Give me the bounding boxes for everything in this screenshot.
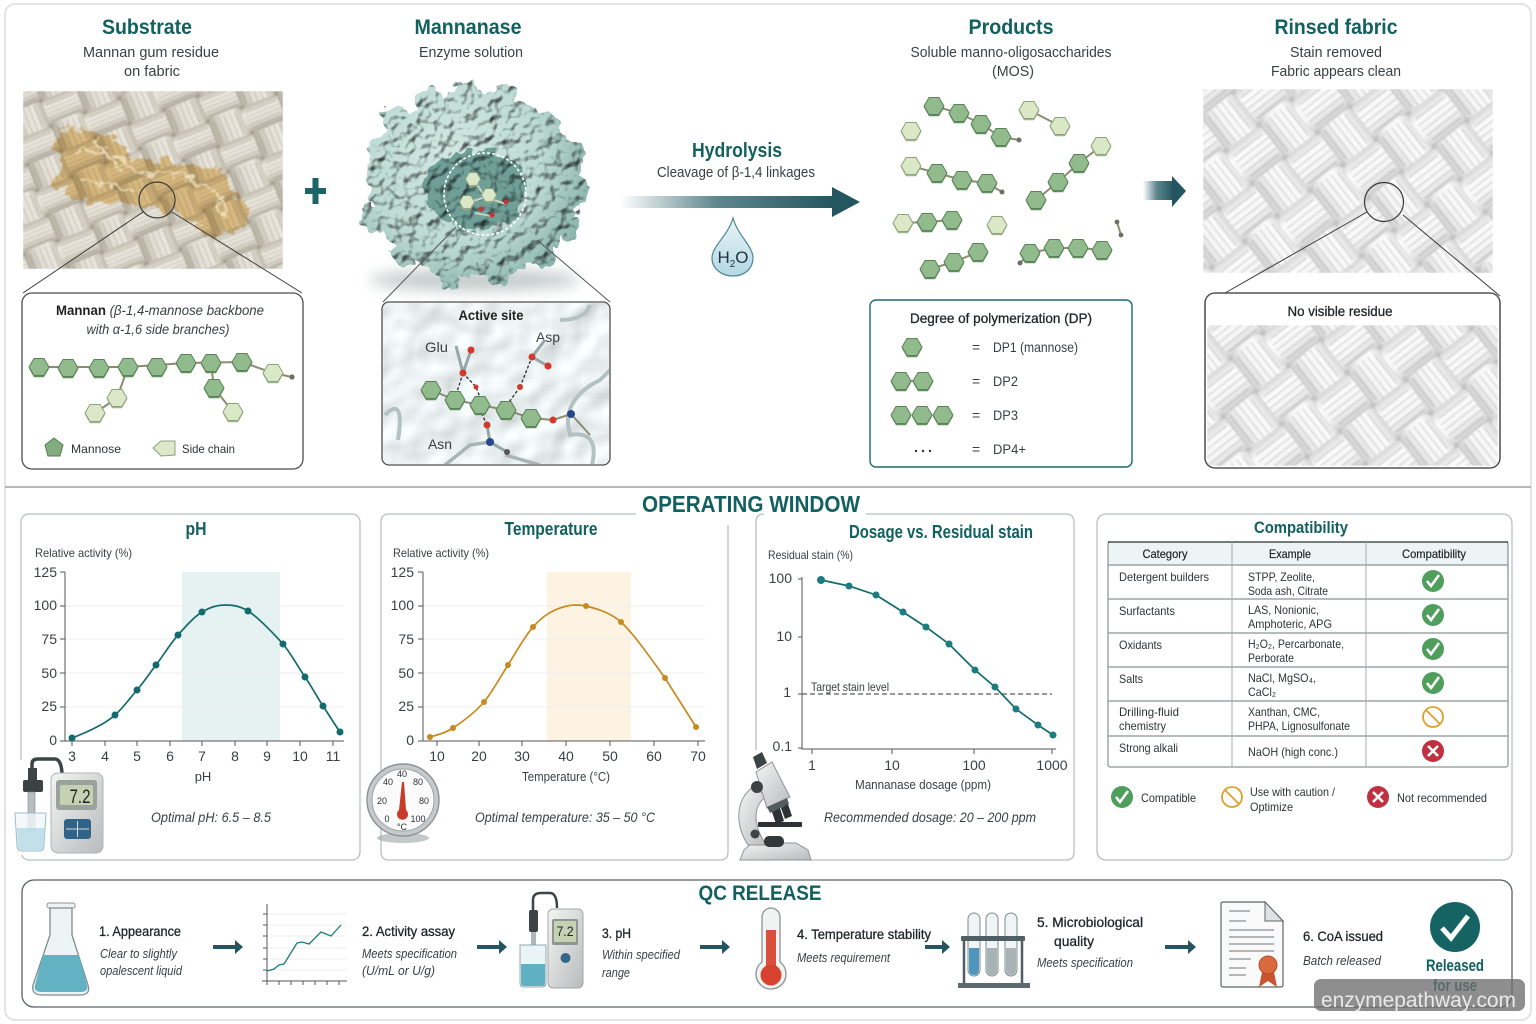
icon: water drop: [712, 218, 753, 276]
row: dp3: DP3: [993, 407, 1018, 423]
table rows: Soda ash, Citrate: [1248, 584, 1328, 598]
residue labels: Asp: [536, 329, 560, 345]
arrow: step 2 to 3: [477, 940, 507, 954]
chart: ph activity curve: 4: [101, 748, 109, 764]
table rows: chemistry: [1119, 719, 1166, 733]
row: dp1: [902, 338, 1078, 357]
residue labels: Asn: [428, 436, 452, 452]
table rows: NaCl, MgSO₄,: [1248, 671, 1316, 685]
chart: temperature activity curve: [391, 564, 706, 784]
bound substrate molecule: [421, 340, 590, 455]
icon: dial thermometer: 100: [410, 814, 426, 824]
chart: temperature activity curve: 50: [602, 748, 618, 764]
icon: dial thermometer: [367, 764, 439, 843]
text: step 3: 3. pH: [602, 925, 631, 941]
heading: dosage: Dosage vs. Residual stain: [849, 522, 1033, 542]
column: rinsed fabric: [1203, 16, 1500, 468]
heading: ph: pH: [186, 519, 206, 539]
chart: temperature activity curve: 100: [391, 597, 414, 613]
row: dp4+: [915, 441, 1026, 457]
chart: dose response: 1: [808, 757, 816, 773]
table rows: CaCl₂: [1248, 685, 1276, 699]
arrow: step 1 to 2: [213, 940, 243, 954]
table header: [1142, 547, 1466, 561]
legend: mannose and side chain: [45, 438, 235, 456]
chart: dose response: 10: [884, 757, 900, 773]
chart: temperature activity curve: 20: [471, 748, 487, 764]
residue labels: Glu: [425, 339, 448, 355]
arrow: to rinsed fabric: [1143, 176, 1186, 207]
chart: ph activity curve: [34, 564, 344, 784]
zoom lens and connector lines: [23, 182, 302, 293]
chart: ph activity curve: 75: [41, 631, 57, 647]
legend: compatibility: [1111, 785, 1487, 814]
icon: ph meter: [14, 759, 103, 855]
table rows: Xanthan, CMC,: [1248, 705, 1320, 719]
heading: compatibility: Compatibility: [1254, 518, 1348, 537]
arrow: step 5 to 6: [1165, 940, 1196, 954]
chart: ph activity curve: 100: [34, 597, 57, 613]
legend: mannose and side chain: Side chain: [182, 442, 235, 456]
arrow: hydrolysis: [620, 187, 860, 217]
row: dp3: =: [972, 407, 980, 423]
row: dp1: =: [972, 339, 980, 355]
table rows: PHPA, Lignosulfonate: [1248, 719, 1350, 733]
enzyme structure: [361, 80, 590, 291]
chart: temperature activity curve: 10: [429, 748, 445, 764]
table header: Category: [1142, 547, 1188, 561]
panel: mannan structure: [22, 293, 303, 469]
icon: activity chart: [262, 904, 347, 985]
chart: ph activity curve: 9: [263, 748, 271, 764]
step 2: activity assay: [262, 904, 457, 985]
text: step 2: 2. Activity assay: [362, 923, 455, 939]
icon: certificate document: [1221, 902, 1283, 987]
text: active site: Active site: [458, 307, 524, 323]
table rows: Salts: [1119, 672, 1143, 686]
heading: temperature: Temperature: [504, 519, 598, 539]
legend: compatibility: Use with caution /: [1250, 785, 1336, 799]
watermark: [1314, 979, 1525, 1012]
text: step 1: 1. Appearance: [99, 923, 181, 939]
row: dp4+: DP4+: [993, 441, 1026, 457]
chart: ph activity curve: 7: [198, 748, 206, 764]
subtitle: mannan gum residue: on fabric: [124, 63, 180, 80]
chart: dose response: Target stain level: [811, 680, 889, 694]
chart: dose response: Mannanase dosage (ppm): [855, 777, 991, 792]
panel: temperature: [367, 514, 728, 860]
chain: mannan backbone with branches: [29, 354, 295, 423]
divider: [5, 486, 1531, 488]
table header: Example: [1269, 547, 1311, 561]
chart: ph activity curve: 10: [292, 748, 308, 764]
enzyme pocket: [423, 150, 526, 230]
icon: dial thermometer: 40: [397, 769, 407, 779]
chart: dose response: 100: [769, 570, 792, 586]
badge: released for use: [1426, 902, 1484, 995]
chart: temperature activity curve: 75: [398, 631, 414, 647]
text: recommended dosage: Recommended dosage: 20 – 200 ppm: [824, 809, 1036, 825]
chart: ph activity curve: 25: [41, 698, 57, 714]
icon: ph meter: 7.2: [70, 787, 90, 808]
text: mannan description: [56, 302, 264, 337]
chart: temperature activity curve: 0: [406, 732, 414, 748]
legend: compatibility: Not recommended: [1397, 791, 1487, 805]
icon: dial thermometer: 20: [377, 796, 387, 806]
chart: dose response: 0.1: [773, 738, 792, 754]
legend: compatibility: Compatible: [1141, 791, 1196, 805]
text: step 5: quality: [1054, 933, 1094, 949]
table rows: LAS, Nonionic,: [1248, 603, 1319, 617]
text: step 6: Batch released: [1303, 953, 1382, 968]
icon: water drop: O: [735, 248, 749, 267]
icon: plus sign: [305, 178, 326, 204]
chart: ph activity curve: 8: [231, 748, 239, 764]
step 6: coa issued: [1221, 902, 1383, 987]
chart: dose response: 1: [783, 684, 791, 700]
text: step 6: [1303, 928, 1383, 968]
icon: water drop: H: [717, 248, 730, 267]
subtitle: mannan gum residue: [83, 44, 219, 80]
chart: dose response: 100: [962, 757, 986, 773]
section: operating window: [14, 491, 1512, 860]
panel: ph: [14, 514, 360, 860]
text: optimal ph: Optimal pH: 6.5 – 8.5: [151, 809, 271, 825]
icon: water drop: 2: [730, 259, 736, 270]
chart: temperature activity curve: Temperature (°C): [522, 769, 610, 784]
table rows: Amphoteric, APG: [1248, 617, 1332, 631]
table rows: Detergent builders: [1119, 570, 1209, 584]
section: qc release: [22, 880, 1512, 1007]
table header: Compatibility: [1402, 547, 1466, 561]
text: step 5: Meets specification: [1037, 955, 1133, 970]
icon: dial thermometer: 0: [384, 814, 390, 824]
icon: flask: [33, 903, 89, 995]
legend: mannose and side chain: Mannose: [71, 442, 121, 456]
subtitle: stain removed: Stain removed: [1290, 44, 1382, 61]
hydrolysis label: [657, 140, 815, 181]
icon: ph meter small: 7.2: [556, 923, 574, 939]
arrow: step 4 to 5: [925, 940, 950, 954]
badge: released for use: Released: [1426, 956, 1484, 975]
text: step 2: Meets specification: [362, 946, 457, 961]
text: step 5: 5. Microbiological: [1037, 914, 1143, 930]
row: dp3: [891, 406, 1018, 425]
chart: temperature activity curve: 25: [398, 698, 414, 714]
row: dp1: DP1 (mannose): [993, 339, 1078, 355]
subtitle: stain removed: Fabric appears clean: [1271, 63, 1401, 80]
text: mannan description: with α-1,6 side branches): [86, 321, 230, 337]
subtitle: soluble oligosaccharides: [910, 44, 1112, 80]
arrow: step 3 to 4: [700, 940, 730, 954]
panel: no visible residue: [1205, 293, 1500, 468]
chart: temperature activity curve: 30: [514, 748, 530, 764]
table rows: Oxidants: [1119, 638, 1162, 652]
hydrolysis label: Hydrolysis: [692, 140, 782, 162]
text: optimal temperature: Optimal temperature: 35 – 50 °C: [475, 809, 656, 825]
table rows: Surfactants: [1119, 604, 1175, 618]
step 3: ph: [520, 893, 681, 988]
column: substrate: [22, 16, 303, 469]
zoom lens and connector lines: [1225, 182, 1500, 296]
subtitle: mannan gum residue: Mannan gum residue: [83, 44, 219, 61]
subtitle: enzyme solution: Enzyme solution: [419, 44, 523, 61]
table rows: [1119, 570, 1350, 759]
heading: products: Products: [968, 16, 1054, 39]
chart: dose response: [769, 570, 1068, 792]
residue labels: [425, 329, 560, 452]
text: step 6: 6. CoA issued: [1303, 928, 1383, 944]
icon: thermometer: [756, 908, 786, 989]
bound substrate: [460, 173, 508, 218]
panel: dosage vs residual stain: [739, 514, 1074, 860]
text: mannan description: Mannan (β-1,4-mannose backbone: [56, 302, 264, 318]
chart: temperature activity curve: 40: [558, 748, 574, 764]
chart: ph activity curve: 11: [326, 748, 340, 764]
legend: compatibility: Optimize: [1250, 800, 1293, 814]
hydrolysis label: Cleavage of β-1,4 linkages: [657, 164, 815, 181]
text: dp title: Degree of polymerization (DP): [910, 310, 1092, 326]
icon: dial thermometer: 80: [419, 796, 429, 806]
icon: dial thermometer: °C: [397, 822, 408, 832]
molecules: product fragments: [893, 98, 1123, 279]
table: compatibility: [1108, 542, 1508, 767]
step 5: microbiological quality: [958, 913, 1143, 988]
text: step 4: Meets requirement: [797, 950, 891, 965]
text: step 2: (U/mL or U/g): [362, 963, 435, 978]
chart: dose response: 10: [776, 628, 792, 644]
heading: rinsed fabric: Rinsed fabric: [1274, 16, 1398, 39]
connector lines: [383, 227, 610, 302]
column: products: [870, 16, 1132, 467]
heading: mannanase: Mannanase: [414, 16, 522, 39]
image: clean fabric: [1203, 89, 1493, 273]
image: stained fabric: [23, 91, 283, 269]
subtitle: soluble oligosaccharides: Soluble manno-oligosaccharides: [910, 44, 1112, 61]
chart: temperature activity curve: 50: [398, 665, 414, 681]
chart: ph activity curve: 3: [68, 748, 76, 764]
table rows: Perborate: [1248, 651, 1294, 665]
heading: qc release: QC RELEASE: [698, 882, 822, 905]
table rows: H₂O₂, Percarbonate,: [1248, 637, 1344, 651]
chart: ph activity curve: 0: [49, 732, 57, 748]
status icons: [1422, 570, 1444, 762]
panel: compatibility: [1097, 514, 1512, 860]
table rows: Drilling-fluid: [1119, 705, 1179, 719]
axis title: Relative activity (%): [393, 546, 489, 560]
text: step 5: [1037, 914, 1143, 970]
chart: temperature activity curve: 125: [391, 564, 414, 580]
icon: microscope: [739, 752, 811, 860]
subtitle: stain removed: [1271, 44, 1401, 80]
text: step 3: Within specified: [602, 947, 681, 962]
icon: dial thermometer: 80: [413, 777, 423, 787]
text: no visible residue: No visible residue: [1288, 303, 1393, 319]
column: mannanase: [361, 16, 610, 465]
table rows: Strong alkali: [1119, 741, 1178, 755]
heading: operating window: OPERATING WINDOW: [642, 491, 860, 517]
text: step 1: Clear to slightly: [100, 946, 178, 961]
chart: ph activity curve: 50: [41, 665, 57, 681]
badge: released for use: for use: [1433, 976, 1477, 995]
text: step 1: opalescent liquid: [100, 963, 183, 978]
subtitle: soluble oligosaccharides: (MOS): [992, 63, 1034, 80]
watermark: enzymepathway.com: [1321, 989, 1516, 1012]
row: dp2: =: [972, 373, 980, 389]
panel: degree of polymerization: [870, 300, 1132, 467]
row: dp2: DP2: [993, 373, 1018, 389]
row: dp2: [891, 372, 1018, 391]
chart: ph activity curve: 5: [133, 748, 141, 764]
axis title: Relative activity (%): [35, 546, 132, 560]
text: step 2: [362, 923, 457, 978]
step 4: temperature stability: [756, 908, 931, 989]
chart: dose response: 1000: [1036, 757, 1068, 773]
chart: temperature activity curve: 60: [646, 748, 662, 764]
axis title: Residual stain (%): [768, 548, 853, 562]
chart: ph activity curve: 125: [34, 564, 57, 580]
text: step 4: 4. Temperature stability: [797, 926, 931, 942]
table rows: NaOH (high conc.): [1248, 745, 1338, 759]
step 1: appearance: [33, 903, 183, 995]
chart: temperature activity curve: 70: [690, 748, 706, 764]
chart: ph activity curve: pH: [195, 769, 211, 784]
row: dp4+: =: [972, 441, 980, 457]
icon: test tube rack: [958, 913, 1030, 988]
text: step 3: range: [602, 965, 630, 980]
text: step 3: [602, 925, 681, 980]
table rows: STPP, Zeolite,: [1248, 570, 1315, 584]
heading: substrate: Substrate: [102, 16, 192, 39]
panel: active site: [382, 302, 610, 465]
text: step 1: [99, 923, 183, 978]
icon: dial thermometer: 40: [383, 777, 393, 787]
text: step 4: [797, 926, 931, 965]
chart: ph activity curve: 6: [166, 748, 174, 764]
icon: ph meter small: [520, 893, 583, 988]
